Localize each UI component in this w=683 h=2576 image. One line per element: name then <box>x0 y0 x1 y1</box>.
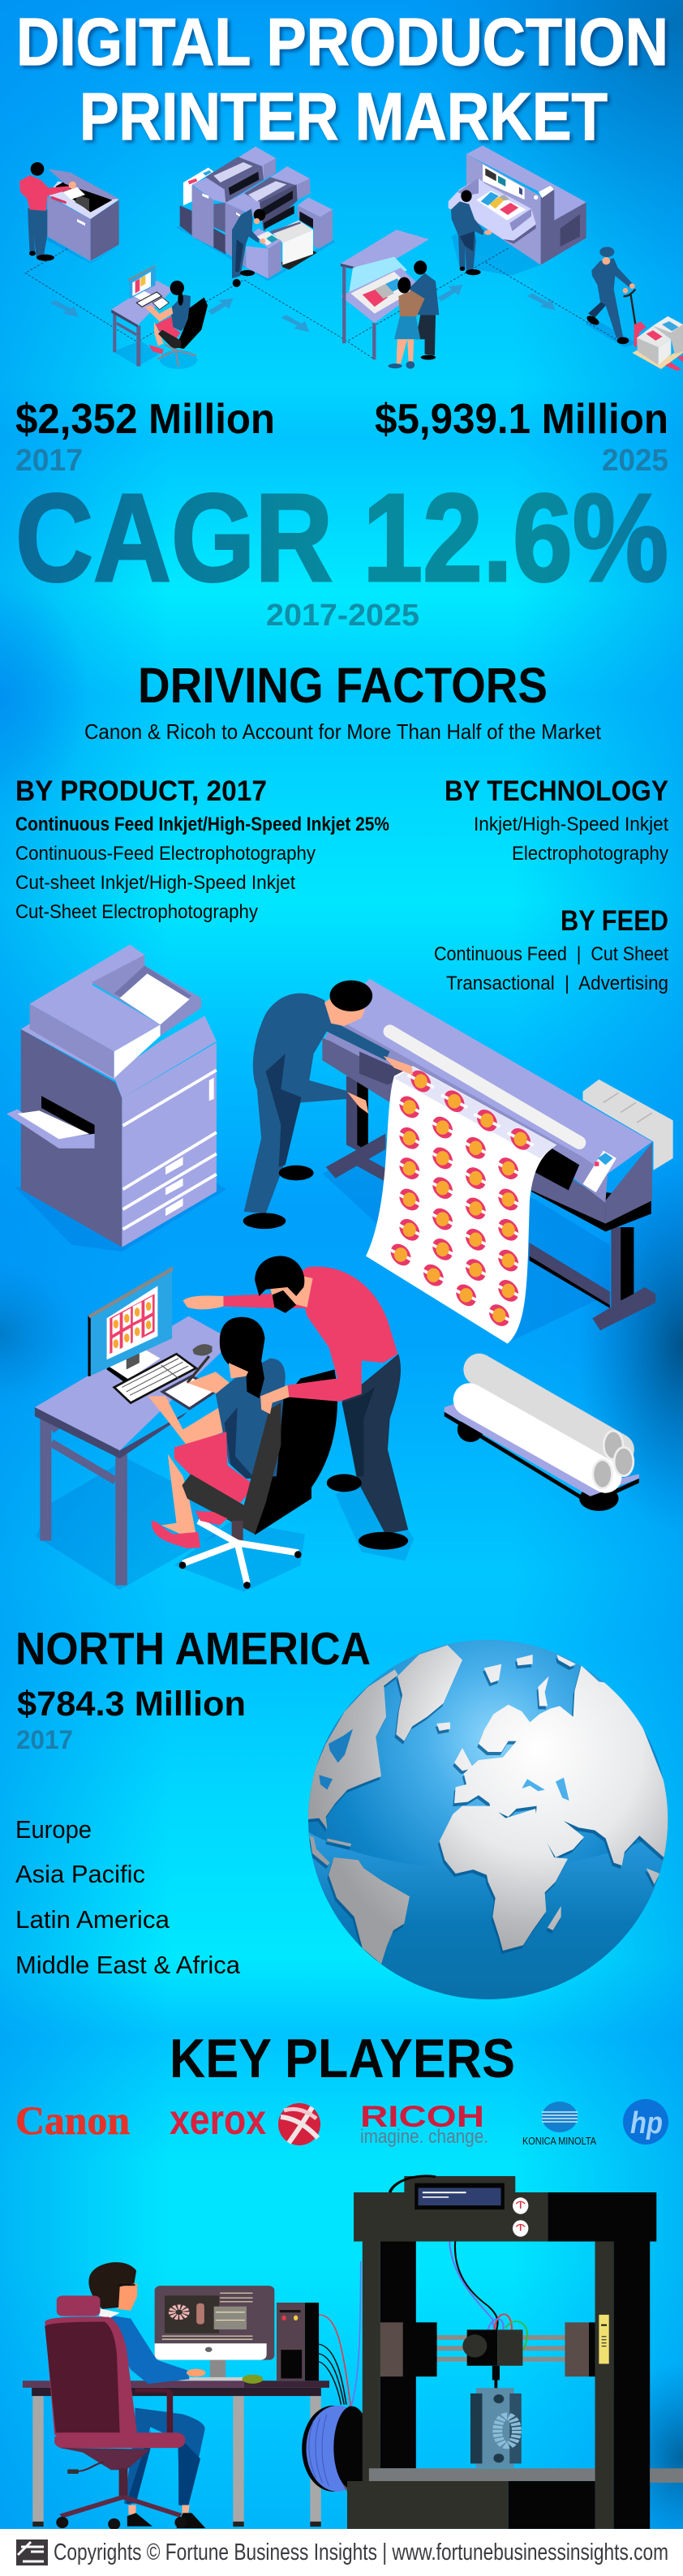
operator <box>88 2262 205 2528</box>
other regions list: Latin America <box>15 1905 170 1934</box>
logo: konica minolta <box>522 2102 596 2147</box>
other regions list: Middle East & Africa <box>15 1951 241 1979</box>
heading: driving factors: DRIVING FACTORS <box>138 658 548 713</box>
print head assembly <box>380 2242 595 2389</box>
by technology list: Electrophotography <box>512 843 668 865</box>
woman at desk <box>111 265 208 369</box>
inland seas <box>319 1729 569 1801</box>
printed sheet <box>366 1066 556 1344</box>
logo: ricoh: imagine. change. <box>360 2126 488 2148</box>
by feed list <box>434 905 668 994</box>
wide format plotter <box>322 979 673 1330</box>
by product list: Continuous Feed Inkjet/High-Speed Inkjet 25% <box>15 814 389 835</box>
other regions list: Europe <box>15 1815 92 1844</box>
continents <box>306 1645 671 1964</box>
copier <box>6 945 217 1247</box>
office chair <box>45 2295 187 2530</box>
machine: cutter with control screen and worker <box>449 145 586 276</box>
logo: xerox: xerox <box>170 2097 266 2144</box>
market value 2017 <box>15 396 275 478</box>
title: PRINTER MARKET <box>79 79 608 154</box>
illustration: print production workflow <box>19 145 683 371</box>
market value 2025: 2025 <box>602 444 668 478</box>
computer tower <box>277 2303 319 2381</box>
region: north america <box>15 1623 371 1754</box>
desk <box>23 2381 329 2527</box>
market value 2017: 2017 <box>15 444 83 478</box>
technician at plotter <box>243 981 413 1229</box>
other regions list: Asia Pacific <box>15 1860 145 1888</box>
CAGR period: 2017-2025 <box>266 599 419 633</box>
heading: key players: KEY PLAYERS <box>170 2028 515 2089</box>
printed gear part <box>470 2388 522 2467</box>
illustration: print shop <box>6 945 673 1592</box>
by product list: Cut-Sheet Electrophotography <box>15 901 258 923</box>
globe <box>306 1640 671 2003</box>
sticker pattern <box>386 1067 535 1330</box>
logo: hp <box>623 2099 668 2145</box>
market value 2017: $2,352 Million <box>15 396 275 443</box>
market value 2025: $5,939.1 Million <box>375 396 668 443</box>
by technology list: Inkjet/High-Speed Inkjet <box>474 814 668 835</box>
desk with monitor <box>35 1266 233 1586</box>
by product list: BY PRODUCT, 2017 <box>15 775 267 807</box>
floor shadows <box>15 1138 610 1592</box>
region: north america: NORTH AMERICA <box>15 1623 371 1675</box>
lower hemisphere shade <box>306 1827 671 2003</box>
by product list: Continuous-Feed Electrophotography <box>15 843 316 865</box>
light table with two people <box>341 230 439 369</box>
filament spool <box>302 2406 370 2492</box>
by technology list <box>445 775 668 865</box>
machine: scanner copier with worker <box>19 162 119 264</box>
seated designer in chair <box>148 1317 337 1589</box>
dashed workflow path <box>25 247 623 359</box>
logo: konica minolta: KONICA MINOLTA <box>522 2135 596 2147</box>
illustration: 3D printing workstation <box>23 2176 683 2530</box>
worker with pallet truck <box>586 247 683 371</box>
logo: ricoh: RICOH <box>360 2100 484 2133</box>
driving factors subtitle: Canon & Ricoh to Account for More Than Half of the Market <box>84 719 602 744</box>
by product list: Cut-sheet Inkjet/High-Speed Inkjet <box>15 872 295 894</box>
monitor <box>155 2286 274 2384</box>
logo: ricoh <box>360 2100 488 2148</box>
3D printer frame <box>347 2176 683 2529</box>
flow arrows <box>50 285 556 332</box>
footer <box>0 2529 683 2576</box>
other regions list <box>15 1815 241 1979</box>
wires <box>319 2261 361 2408</box>
logo: canon: Canon <box>15 2097 130 2143</box>
region: north america: 2017 <box>16 1725 73 1754</box>
region: north america: $784.3 Million <box>17 1685 246 1724</box>
title <box>16 4 668 154</box>
market value 2025 <box>375 396 668 478</box>
by feed list: BY FEED <box>561 905 668 937</box>
by feed list: Transactional | Advertising <box>446 972 668 994</box>
standing supervisor <box>183 1256 408 1550</box>
machine: offset press with worker <box>176 147 335 287</box>
footer logo <box>16 2540 48 2565</box>
paper rolls <box>445 1369 639 1511</box>
logo: hp: hp <box>630 2106 663 2140</box>
by product list <box>15 775 389 923</box>
